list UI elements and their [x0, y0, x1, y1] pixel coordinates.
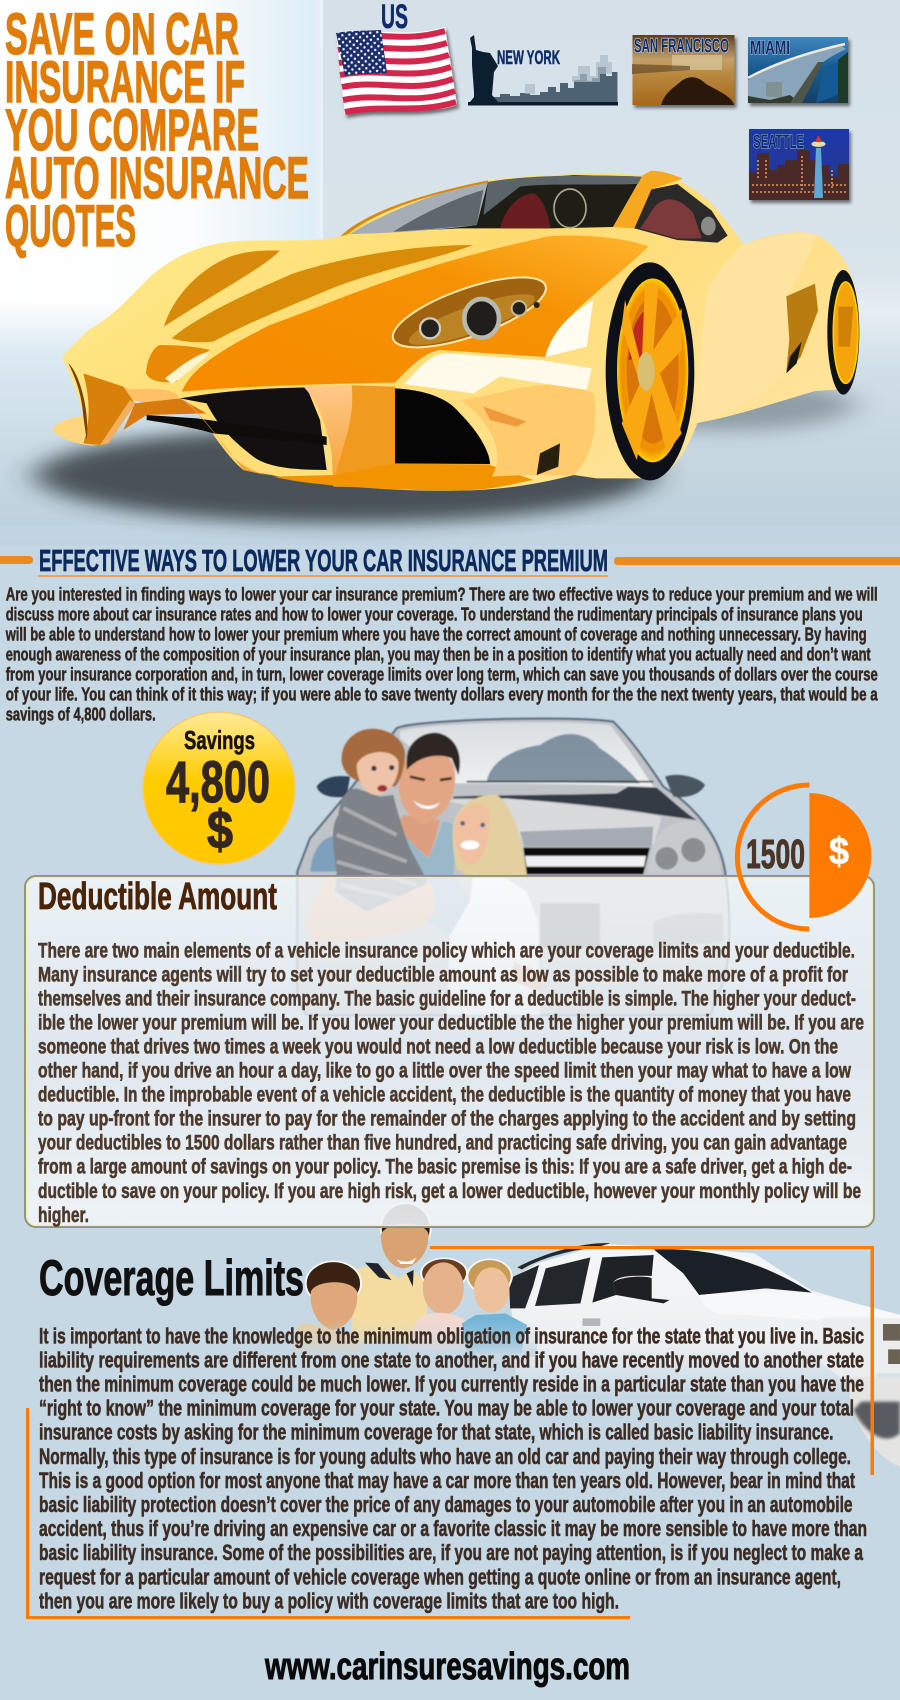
savings badge: $: [207, 800, 233, 860]
icon: New York skyline: [468, 35, 618, 106]
savings badge: 4,800: [166, 750, 270, 815]
icon: US flag: [336, 0, 457, 115]
child coat: [333, 788, 428, 912]
windshield: [350, 175, 642, 234]
photo: Seattle: SEATTLE: [753, 132, 804, 153]
savings badge: [143, 712, 295, 864]
arm: [305, 875, 435, 942]
headlight: [385, 263, 553, 362]
hood main: [182, 235, 649, 392]
coverage frame lines: [26, 1246, 874, 1619]
title: YOU COMPARE: [5, 98, 259, 163]
jeans: [310, 835, 337, 872]
heading: Deductible Amount: [38, 876, 277, 918]
deductible paragraph: higher.: [38, 1203, 89, 1227]
deductible paragraph: [38, 938, 864, 1227]
boy: [306, 1261, 361, 1305]
title: INSURANCE IF: [5, 50, 245, 115]
1500 dollar gauge: [737, 785, 871, 929]
car body: [53, 171, 858, 491]
left fin and strakes: [83, 373, 135, 445]
coverage limits heading: Coverage Limits: [39, 1250, 304, 1306]
website url: www.carinsuresavings.com: [264, 1646, 630, 1688]
girl: [421, 1258, 467, 1288]
silver car: [297, 719, 729, 1015]
man: [397, 822, 470, 942]
right fender: [460, 385, 595, 477]
front wheel: [606, 262, 694, 480]
title: [5, 2, 309, 259]
photo: Seattle: [749, 129, 849, 200]
title: SAVE ON CAR: [5, 2, 239, 67]
photo: Miami: [748, 37, 848, 103]
car shadow: [35, 379, 855, 523]
1500 dollar gauge: $: [829, 831, 849, 873]
deductible panel: [25, 876, 874, 1227]
intro paragraph: [5, 584, 878, 725]
rear wheel: [827, 270, 859, 395]
center pillar: [303, 385, 491, 488]
fade: [280, 1320, 537, 1357]
SUV body: [509, 1244, 900, 1407]
man: [381, 1203, 431, 1253]
photo: San Francisco: SAN FRANCISCO: [634, 34, 729, 58]
icon: New York skyline: NEW YORK: [497, 48, 560, 69]
woman: [447, 870, 540, 1015]
family with white SUV: [280, 1203, 900, 1467]
grille black: [180, 387, 327, 470]
1500 dollar gauge: 1500: [746, 831, 805, 877]
title: AUTO INSURANCE: [5, 146, 309, 211]
savings badge: Savings: [184, 725, 255, 755]
hood stripe: [172, 245, 473, 342]
right intake: [395, 388, 490, 464]
yellow sports car: [53, 171, 859, 491]
side window: [634, 184, 728, 243]
left vent: [164, 250, 280, 327]
snout: [146, 345, 210, 382]
title: QUOTES: [5, 194, 136, 259]
photo: San Francisco: [632, 34, 734, 105]
intro paragraph: savings of 4,800 dollars.: [6, 704, 156, 725]
rear side panel: [693, 233, 817, 423]
coverage paragraph: [39, 1323, 867, 1613]
child head: [342, 729, 405, 787]
photo: Miami: MIAMI: [750, 38, 790, 59]
coverage paragraph: then you are more likely to buy a policy with coverage limits that are too high.: [39, 1588, 619, 1613]
mother: [467, 1259, 512, 1294]
photo: family with silver car: [297, 719, 729, 1015]
